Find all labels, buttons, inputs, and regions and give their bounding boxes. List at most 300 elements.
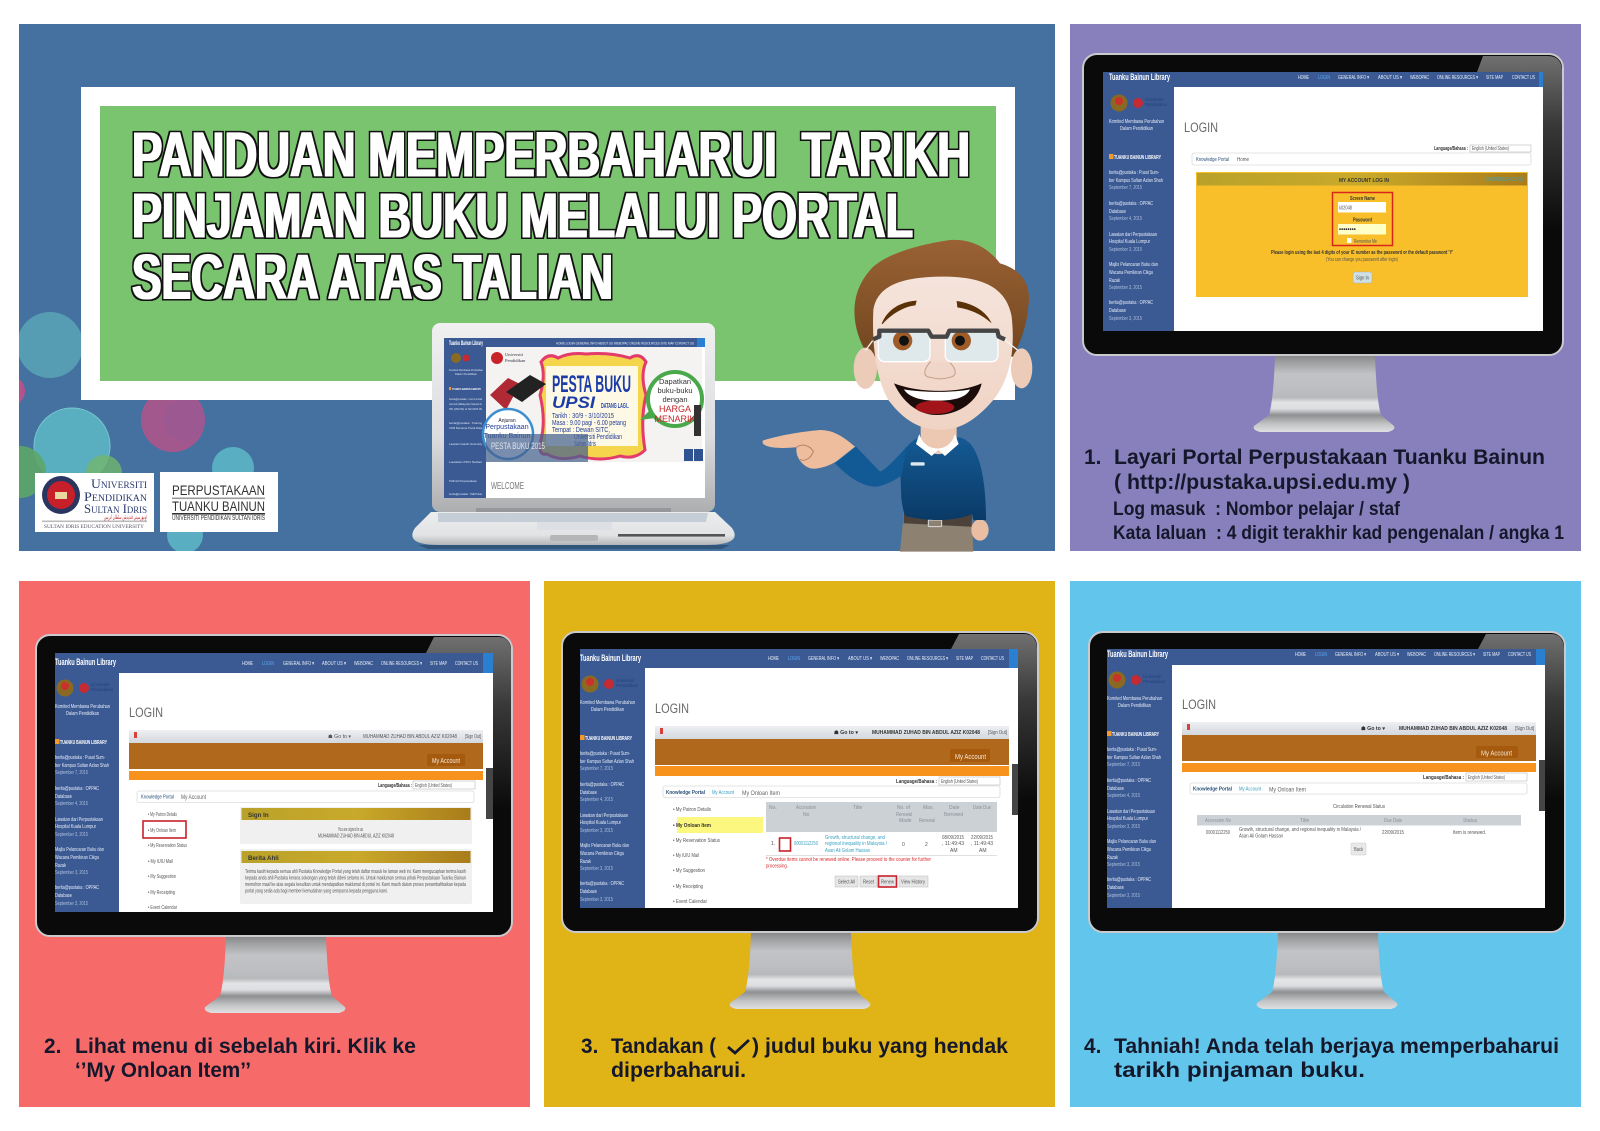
step 3 text: diperbaharui.: [611, 1059, 746, 1082]
loan table: 08/09/2015: [942, 835, 964, 841]
book fair banner: Tarikh : 30/9 - 3/10/2015: [552, 413, 614, 420]
sidebar: berita@pustaka : Pusat Sum-: [1107, 747, 1157, 753]
nav bar: GENERAL INFO ▾: [1335, 652, 1366, 658]
nav bar: SITE MAP: [956, 656, 973, 662]
nav bar: LOGIN: [262, 661, 274, 667]
nav bar: HOME: [768, 656, 779, 662]
nav bar: [242, 661, 478, 667]
screen: login page: Language/Bahasa :: [1434, 146, 1468, 152]
sidebar: Lawatan dari Perpustakaan: [1109, 232, 1157, 238]
sidebar: Database: [1109, 308, 1126, 314]
step 3 text: ) judul buku yang hendak: [752, 1035, 1008, 1058]
left menu: • My Reservation Status: [148, 843, 187, 849]
nav bar: CONTACT US: [1512, 75, 1535, 81]
sidebar: September 3, 2015: [1107, 862, 1140, 868]
nav bar: CONTACT US: [1508, 652, 1531, 658]
loan table: [766, 802, 997, 870]
loan table: 0: [902, 842, 905, 848]
title: PANDUAN MEMPERBAHARUI TARIKH: [132, 118, 970, 190]
ears: [854, 348, 877, 389]
panel: step 4: [1070, 581, 1581, 1107]
sidebar: Komited Membawa Perubahan: [1109, 119, 1164, 125]
sidebar: September 3, 2015: [1107, 893, 1140, 899]
left menu: [143, 812, 187, 911]
green board: [100, 106, 996, 381]
monitor stand: [730, 932, 870, 1009]
login box: k02048: [1339, 206, 1352, 212]
sidebar: Razak: [55, 863, 66, 869]
loan table: Borrowed: [944, 812, 963, 818]
arm: [835, 447, 907, 487]
logo: Universiti Pendidikan Sultan Idris: اونيۏرسيتي ڤنديديقن سلطان ادريس: [104, 514, 147, 521]
hair: [854, 240, 1029, 362]
news panel: portal yang sedia ada bagi memberi kemudahan yang sempurna kepada pengguna kami.: [245, 888, 388, 894]
laptop screen: berita@pustaka : TalkTicket: [449, 492, 482, 496]
screen: onloan items page: Language/Bahasa :: [896, 779, 937, 785]
loan table: , 11:49:43: [971, 841, 993, 847]
loan table: 22/09/2015: [971, 835, 993, 841]
news panel: [240, 849, 472, 904]
sidebar: berita@pustaka : OPPAC: [1109, 201, 1153, 207]
login box: [1196, 172, 1528, 297]
sidebar: September 7, 2015: [1107, 762, 1140, 768]
news panel: Berita Ahli: [248, 855, 279, 862]
nav bar: SITE MAP: [430, 661, 447, 667]
logo: Perpustakaan Tuanku Bainun: [160, 472, 278, 532]
left menu: • My Suggestion: [673, 868, 705, 874]
screen: onloan items page: English (United States): [941, 779, 978, 785]
collar: [916, 434, 959, 456]
book fair banner: PESTA BUKU: [552, 371, 631, 398]
nav bar: ONLINE RESOURCES ▾: [907, 656, 948, 662]
screen: my account page: English (United States): [415, 783, 452, 789]
monitor stand: [205, 936, 345, 1013]
decorative bubbles: [0, 312, 254, 553]
nav bar: LOGIN: [788, 656, 800, 662]
book fair banner: Sultan Idris: [574, 441, 596, 448]
sidebar: Database: [55, 794, 72, 800]
step 4 text: Tahniah! Anda telah berjaya memperbaharui: [1114, 1035, 1559, 1058]
laptop screen: WELCOME: [491, 481, 524, 492]
logo: Universiti Pendidikan Sultan Idris: Sultan Idris: [84, 501, 147, 516]
nav bar: ABOUT US ▾: [848, 656, 872, 662]
panel: title banner: [0, 24, 1055, 553]
sidebar: Razak: [580, 859, 591, 865]
book fair banner: Tempat : Dewan SITC,: [552, 427, 610, 434]
sidebar: September 3, 2015: [1107, 824, 1140, 830]
loan table: Accession: [796, 805, 816, 811]
sidebar: September 3, 2015: [1109, 285, 1142, 291]
screen: renewal status page: [1107, 649, 1545, 908]
step 3 text: Tandakan (: [611, 1035, 716, 1058]
loan table: 00001112250: [794, 841, 818, 847]
book fair banner: Masa : 9.00 pagi - 6.00 petang: [552, 420, 626, 427]
screen: my account page: My Account: [181, 794, 206, 801]
book fair banner: Pendidikan: [505, 358, 526, 363]
sidebar: Wacana Pemikiran Cikgu: [1107, 847, 1151, 853]
account header: MUHAMMAD ZUHAD BIN ABDUL AZIZ K02048: [363, 734, 457, 740]
account header: [129, 730, 483, 780]
book fair banner: HARGA: [659, 404, 691, 414]
book fair banner: dengan: [662, 395, 688, 404]
sidebar: Universiti: [1143, 674, 1162, 679]
account header: My Account: [955, 752, 987, 761]
account header: [655, 726, 1009, 776]
logo: Perpustakaan Tuanku Bainun: UNIVERSITI PENDIDIKAN SULTAN IDRIS: [172, 515, 265, 522]
monitor: [1089, 632, 1565, 932]
book fair banner: Universiti Pendidikan: [574, 434, 622, 441]
nav bar: GENERAL INFO ▾: [808, 656, 839, 662]
sidebar: ber Kampus Sultan Azlan Shah: [1107, 755, 1161, 761]
step 1 text: Log masuk : Nombor pelajar / staf: [1113, 499, 1401, 520]
nav bar: GENERAL INFO ▾: [1338, 75, 1369, 81]
sidebar: Pendidikan: [616, 683, 639, 688]
sidebar: Hospital Kuala Lumpur: [1107, 816, 1148, 822]
sidebar: berita@pustaka : Pusat Sum-: [1109, 170, 1159, 176]
sign in panel: You are signed in as: [338, 827, 363, 833]
screen: login page: English (United States): [1472, 146, 1509, 152]
sidebar: [1107, 649, 1168, 899]
sidebar: Database: [580, 790, 597, 796]
screen: renewal status page: Knowledge Portal: [1193, 786, 1233, 792]
loan table: Made: [899, 818, 912, 824]
renewal table: [1197, 804, 1521, 855]
step 1 text: ( http://pustaka.upsi.edu.my ): [1114, 471, 1410, 494]
left menu: • My Onloan Item: [673, 823, 712, 829]
action buttons: [835, 876, 928, 887]
action buttons: Reset: [863, 880, 875, 886]
sidebar: ber Kampus Sultan Azlan Shah: [55, 763, 109, 769]
sidebar: September 3, 2015: [1109, 316, 1142, 322]
sidebar: September 3, 2015: [1109, 247, 1142, 253]
laptop screen: Tahfmid Perpustakaan: [449, 479, 477, 483]
right hand: [971, 519, 989, 541]
laptop screen: Journal (Malaysia) Indexed in: [449, 402, 482, 406]
left menu: • My Patron Details: [673, 807, 711, 813]
book fair banner: Perpustakaan: [485, 424, 529, 431]
sidebar: Database: [55, 893, 72, 899]
account header: MUHAMMAD ZUHAD BIN ABDUL AZIZ K02048: [872, 730, 980, 736]
renewal table: Due Date: [1384, 818, 1402, 824]
logo: Universiti Pendidikan Sultan Idris: Universiti: [91, 476, 147, 491]
laptop screen: Lawatan Fakulti University: [449, 442, 482, 446]
screen: renewal status page: Language/Bahasa :: [1423, 775, 1464, 781]
loan table: Asan Ali Golam Hassan: [825, 848, 870, 854]
loan table: Renewal: [896, 812, 912, 818]
loan table: AM: [979, 848, 986, 854]
nav bar: HOME: [1295, 652, 1306, 658]
face: [873, 277, 1013, 430]
sidebar: Database: [1107, 786, 1124, 792]
laptop screen: Tuanku Bainun Library: [449, 341, 483, 347]
sidebar: Database: [1109, 209, 1126, 215]
sidebar: Tuanku Bainun Library: [55, 657, 116, 667]
sidebar: Lawatan dari Perpustakaan: [580, 813, 628, 819]
sidebar: [1109, 72, 1170, 322]
sidebar: Dalam Pendidikan: [591, 707, 624, 713]
book fair banner: UPSI: [552, 393, 596, 412]
left menu: • My Patron Details: [148, 812, 177, 818]
renewal table: 22/09/2015: [1382, 830, 1404, 836]
renewal table: Asan Ali Golam Hassan: [1239, 834, 1283, 840]
nav bar: CONTACT US: [981, 656, 1004, 662]
monitor: [36, 635, 512, 936]
news panel: Terima kasih kepada semua ahli Pustaka Knowledge Portal yang telah daftar masuk ke laman web ini. Kami mengucapkan terima kasih: [245, 869, 466, 875]
nav bar: ABOUT US ▾: [322, 661, 346, 667]
sidebar: berita@pustaka : OPPAC: [1109, 300, 1153, 306]
nose: [925, 362, 955, 379]
sidebar: Hospital Kuala Lumpur: [1109, 239, 1150, 245]
left menu: [673, 807, 763, 905]
laptop screen: UKM Bersama Portal Data: [449, 426, 482, 430]
login box: Please login using the last 4 digits of your IC number as the password or the default password 'Y': [1271, 250, 1453, 256]
login box: MY ACCOUNT LOG IN: [1339, 178, 1389, 184]
sidebar: TUANKU BAINUN LIBRARY: [60, 740, 107, 746]
action buttons: View History: [901, 880, 925, 886]
book fair banner: PESTA BUKU 2015: [491, 441, 545, 451]
step 2 text: ‘’My Onloan Item’’: [75, 1059, 251, 1082]
account header: [Sign Out]: [465, 734, 481, 740]
nav bar: ONLINE RESOURCES ▾: [1434, 652, 1475, 658]
nav bar: ABOUT US ▾: [1375, 652, 1399, 658]
logo: Perpustakaan Tuanku Bainun: PERPUSTAKAAN: [172, 482, 265, 498]
trousers: [900, 512, 973, 552]
page heading: LOGIN: [655, 701, 689, 716]
loan table: Date: [949, 805, 960, 811]
nav bar: WEBOPAC: [354, 661, 373, 667]
laptop screen: HOME LOGIN GENERAL INFO ABOUT US WEBOPAC ONLINE RESOURCES SITE MAP CONTACT US: [556, 342, 695, 346]
action buttons: Select All: [838, 880, 855, 886]
loan table: 2: [925, 842, 928, 848]
sidebar: September 7, 2015: [580, 766, 613, 772]
sidebar: September 4, 2015: [580, 797, 613, 803]
step 2 text: 2.: [44, 1035, 61, 1058]
sidebar: Database: [580, 889, 597, 895]
loan table: No.: [769, 805, 777, 811]
step 4 text: tarikh pinjaman buku.: [1114, 1059, 1365, 1082]
loan table: 1.: [771, 841, 775, 847]
step 3 text: 3.: [581, 1035, 598, 1058]
laptop screen: berita@pustaka : Training: [449, 421, 482, 425]
nav bar: LOGIN: [1318, 75, 1330, 81]
account header: My Account: [1481, 748, 1513, 758]
logo: Universiti Pendidikan Sultan Idris: Pendidikan: [84, 489, 148, 504]
logo: Universiti Pendidikan Sultan Idris: [35, 473, 154, 532]
sidebar: Pendidikan: [1145, 102, 1168, 107]
loan table: , 11:49:43: [942, 841, 964, 847]
sidebar: Wacana Pemikiran Cikgu: [55, 855, 99, 861]
step 1 text: Layari Portal Perpustakaan Tuanku Bainun: [1114, 446, 1545, 469]
sidebar: September 3, 2015: [55, 901, 88, 907]
nav bar: HOME: [1298, 75, 1309, 81]
pointing hand: [763, 430, 855, 469]
sidebar: Tuanku Bainun Library: [1109, 72, 1170, 82]
screen: renewal status page: My Onloan Item: [1269, 786, 1306, 794]
sidebar: September 4, 2015: [1109, 216, 1142, 222]
sidebar: berita@pustaka : OPPAC: [55, 885, 99, 891]
account header: [1182, 722, 1536, 772]
nav bar: [1295, 652, 1531, 658]
sidebar: Universiti: [91, 682, 110, 687]
icon: check mark: [728, 1040, 749, 1053]
sidebar: Majlis Pelancaran Buku dan: [580, 843, 629, 849]
sidebar: berita@pustaka : Pusat Sum-: [580, 751, 630, 757]
left menu: • My IUIU Mail: [673, 853, 699, 859]
nav bar: ONLINE RESOURCES ▾: [1437, 75, 1478, 81]
page heading: LOGIN: [1184, 120, 1218, 135]
sidebar: September 3, 2015: [55, 832, 88, 838]
panel: step 3: [544, 581, 1055, 1107]
sidebar: berita@pustaka : OPPAC: [1107, 877, 1151, 883]
laptop screen: Dalam Pendidikan: [455, 372, 477, 376]
screen: my account page: [55, 653, 493, 912]
sidebar: Lawatan dari Perpustakaan: [1107, 809, 1155, 815]
left menu: • My Onloan Item: [148, 828, 176, 834]
nav bar: SITE MAP: [1486, 75, 1503, 81]
sidebar: Lawatan dari Perpustakaan: [55, 817, 103, 823]
sidebar: Hospital Kuala Lumpur: [580, 820, 621, 826]
left menu: • My Receipting: [673, 884, 703, 890]
sidebar: September 4, 2015: [1107, 793, 1140, 799]
sign in panel: Sign In: [248, 812, 269, 819]
book fair banner: Universiti: [505, 352, 524, 357]
sidebar: TUANKU BAINUN LIBRARY: [1112, 732, 1159, 738]
sidebar: Universiti: [616, 678, 635, 683]
screen: renewal status page: My Account: [1239, 786, 1262, 792]
screen: login page: Home: [1237, 157, 1249, 163]
mouth: [894, 383, 982, 415]
sidebar: Universiti: [1145, 97, 1164, 102]
panel: step 2: [19, 581, 530, 1107]
step 3 text: [581, 1035, 1008, 1082]
sidebar: TUANKU BAINUN LIBRARY: [1114, 155, 1161, 161]
sign in panel: MUHAMMAD ZUHAD BIN ABDUL AZIZ K02048: [318, 834, 394, 840]
sidebar: ber Kampus Sultan Azlan Shah: [1109, 178, 1163, 184]
left menu: • My IUIU Mail: [148, 859, 173, 865]
login box: ••••••••: [1339, 228, 1356, 234]
login box: Password: [1353, 218, 1372, 224]
nav bar: ABOUT US ▾: [1378, 75, 1402, 81]
nav bar: GENERAL INFO ▾: [283, 661, 314, 667]
logo: Universiti Pendidikan Sultan Idris: SULTAN IDRIS EDUCATION UNIVERSITY: [44, 524, 144, 530]
title: PINJAMAN BUKU MELALUI PORTAL: [132, 180, 913, 252]
book fair banner: [483, 347, 703, 462]
book fair banner: Tuanku Bainun: [484, 433, 531, 440]
left menu: • My Receipting: [148, 890, 175, 896]
login box: Remember Me: [1354, 239, 1377, 245]
left menu: • My Suggestion: [148, 874, 176, 880]
step 1 text: [1084, 446, 1564, 544]
screen: login page: [1103, 72, 1543, 331]
sidebar: berita@pustaka : OPPAC: [55, 786, 99, 792]
sidebar: berita@pustaka : OPPAC: [1107, 778, 1151, 784]
left menu: • My Reservation Status: [673, 838, 720, 844]
loan table: AM: [950, 848, 958, 854]
loan table: Max.: [923, 805, 934, 811]
screen: renewal status page: English (United States): [1468, 775, 1505, 781]
sidebar: Database: [1107, 885, 1124, 891]
sidebar: Komited Membawa Perubahan: [55, 704, 110, 710]
sidebar: Komited Membawa Perubahan: [1107, 696, 1162, 702]
loan table: Renewal: [919, 818, 935, 824]
sidebar: Majlis Pelancaran Buku dan: [55, 847, 104, 853]
page heading: LOGIN: [1182, 697, 1216, 712]
screen: my account page: Knowledge Portal: [141, 794, 174, 800]
sidebar: Pendidikan: [1143, 679, 1166, 684]
sidebar: September 7, 2015: [1109, 185, 1142, 191]
character: pointing man: [763, 240, 1032, 552]
loan table: processing.: [766, 864, 788, 870]
laptop screen: Komited Membawa Perubahan: [449, 368, 483, 372]
sidebar: Dalam Pendidikan: [66, 711, 99, 717]
screen: onloan items page: My Account: [712, 790, 735, 796]
eyebrows: [882, 301, 917, 324]
sidebar: Wacana Pemikiran Cikgu: [1109, 270, 1153, 276]
nav bar: WEBOPAC: [1410, 75, 1429, 81]
renewal table: Accession No: [1205, 818, 1231, 824]
screen: onloan items page: [580, 649, 1018, 908]
laptop screen: ISI (WOS) & SCOPUS: [449, 407, 482, 411]
login box: Screen Name: [1350, 196, 1375, 202]
loan table: regional inequality in Malaysia /: [825, 841, 888, 847]
step 4 text: [1084, 1035, 1559, 1082]
sidebar: Majlis Pelancaran Buku dan: [1107, 839, 1156, 845]
laptop screen: [444, 338, 705, 498]
book fair banner: Dapatkan: [659, 377, 691, 386]
sidebar: September 7, 2015: [55, 770, 88, 776]
nav bar: LOGIN: [1315, 652, 1327, 658]
account header: [Sign Out]: [988, 730, 1008, 736]
sidebar: ber Kampus Sultan Azlan Shah: [580, 759, 634, 765]
nav bar: [1298, 75, 1535, 81]
step 1 text: Kata laluan : 4 digit terakhir kad pengenalan / angka 1: [1113, 523, 1564, 544]
sidebar: September 3, 2015: [580, 866, 613, 872]
sidebar: Majlis Pelancaran Buku dan: [1109, 262, 1158, 268]
book fair banner: DATANG LAGI..: [601, 403, 629, 410]
sign in panel: [240, 807, 472, 844]
renewal table: Status: [1463, 818, 1478, 824]
account header: MUHAMMAD ZUHAD BIN ABDUL AZIZ K02048: [1399, 726, 1507, 732]
laptop screen: berita@pustaka : List of Local: [449, 397, 482, 401]
action buttons: Renew: [881, 880, 894, 886]
news panel: memohon maaf ke atas segala kesulitan untuk mendapatkan maklumat di portal ini. Kami masih dalam proses penambahbaikan kepada: [245, 882, 466, 888]
neck: [921, 420, 957, 454]
title: SECARA ATAS TALIAN: [132, 241, 613, 313]
news panel: kepada anda ahli Pustaka kerana sokongan yang telah diberi selama ini. Untuk makluman semua pihak Perpustakaan Tuanku Bainun: [245, 876, 466, 882]
step 2 text: [44, 1035, 416, 1082]
sidebar: September 4, 2015: [55, 801, 88, 807]
logo: Perpustakaan Tuanku Bainun: TUANKU BAINUN: [172, 498, 265, 514]
step 2 text: Lihat menu di sebelah kiri. Klik ke: [75, 1035, 416, 1058]
nav bar: [768, 656, 1004, 662]
step 4 text: 4.: [1084, 1035, 1101, 1058]
sidebar: [580, 653, 641, 903]
sidebar: berita@pustaka : OPPAC: [580, 881, 624, 887]
sidebar: Hospital Kuala Lumpur: [55, 824, 96, 830]
monitor: [562, 632, 1038, 932]
nav bar: CONTACT US: [455, 661, 478, 667]
account header: My Account: [432, 756, 461, 765]
step 1 text: 1.: [1084, 446, 1101, 469]
nav bar: WEBOPAC: [880, 656, 899, 662]
sweater: [900, 437, 986, 520]
loan table: No: [803, 812, 810, 818]
account header: [Sign Out]: [1515, 726, 1535, 732]
screen: onloan items page: My Onloan Item: [742, 790, 780, 797]
screen: onloan items page: Knowledge Portal: [666, 790, 706, 796]
login box: SIGN IN SECURE: [1486, 177, 1524, 183]
title: [132, 118, 970, 313]
